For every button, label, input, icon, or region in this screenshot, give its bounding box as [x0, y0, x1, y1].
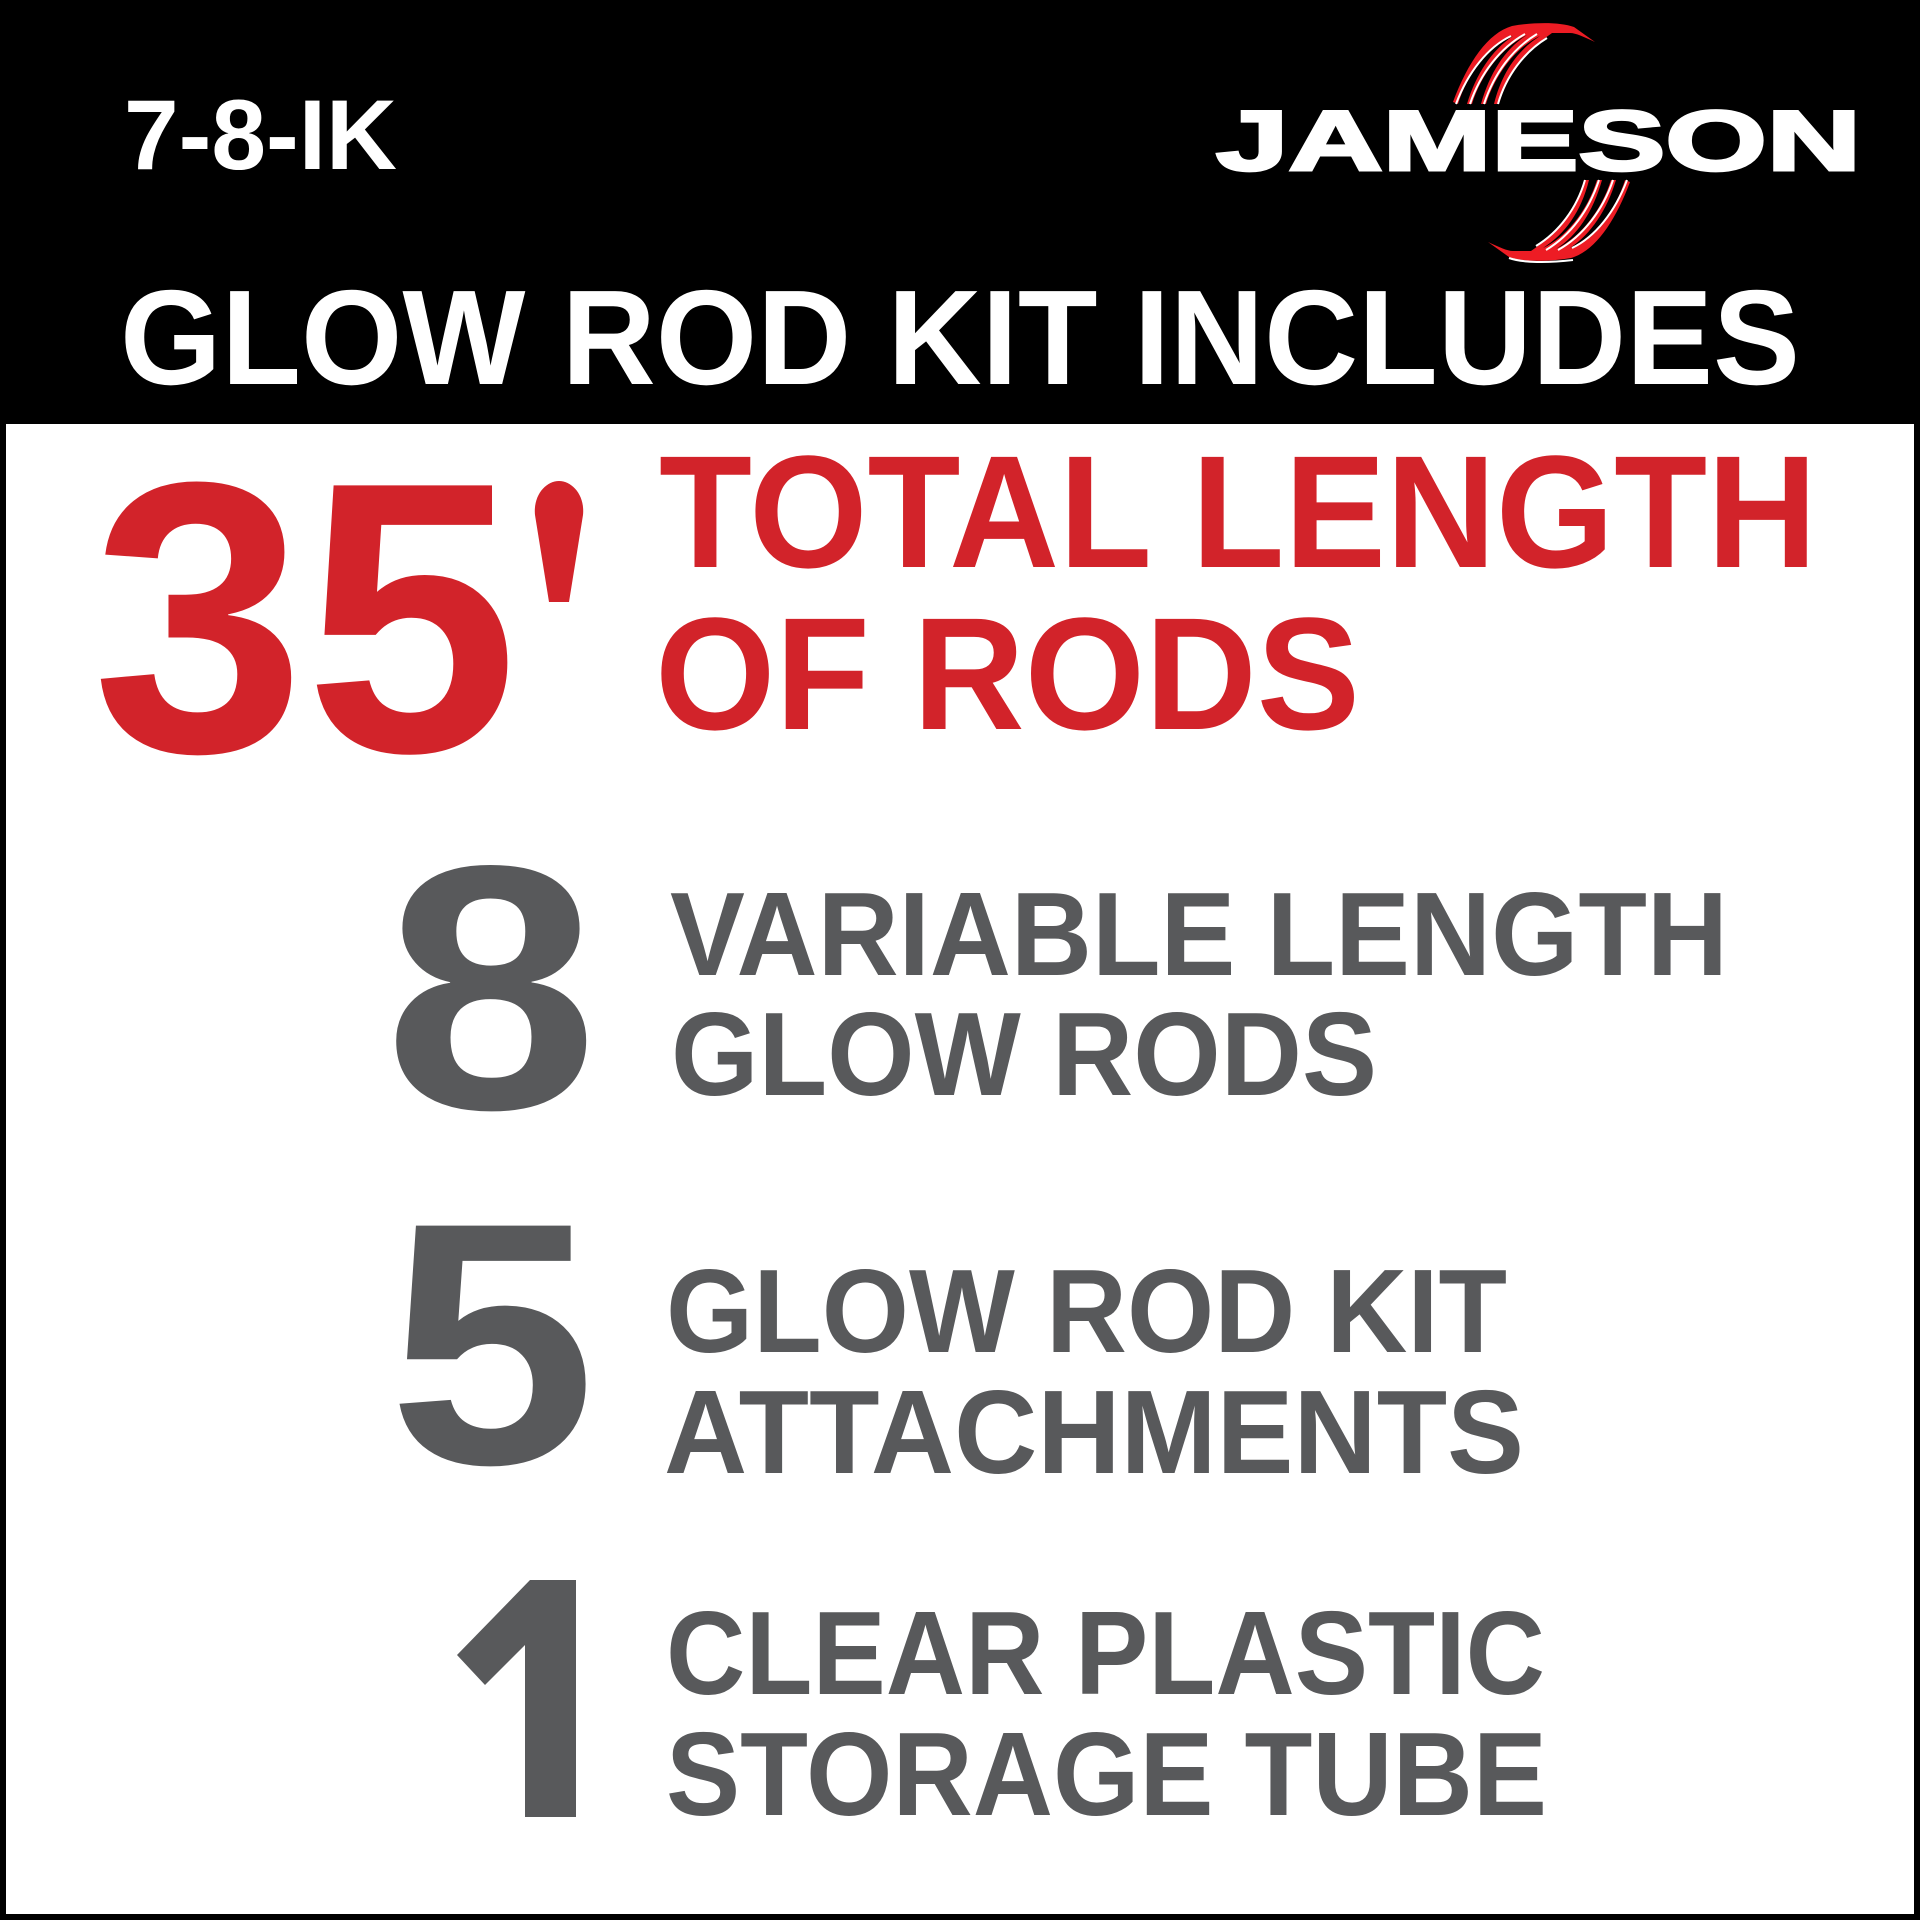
logo: Jameson	[1216, 23, 1861, 262]
number 8: 8	[384, 793, 598, 1182]
description	[664, 1245, 1524, 1499]
stat: 35 feet total length	[92, 402, 1817, 833]
panel: white content area	[6, 424, 1914, 1914]
description	[655, 422, 1817, 763]
logo wordmark: JAMESON	[1216, 94, 1861, 189]
stat: 1 storage tube	[457, 1580, 1543, 1817]
line: variable length: VARIABLE LENGTH	[670, 868, 1728, 1001]
line: storage tube: STORAGE TUBE	[666, 1708, 1547, 1841]
description	[670, 868, 1728, 1121]
line: glow rod kit: GLOW ROD KIT	[666, 1245, 1507, 1378]
description	[666, 1587, 1547, 1841]
line: of rods: OF RODS	[655, 584, 1360, 763]
big number: 35	[92, 402, 518, 833]
stat: 5 attachments	[388, 1152, 1524, 1537]
number 1	[457, 1580, 576, 1817]
number 5: 5	[388, 1152, 596, 1537]
icon: swoosh bottom	[1488, 180, 1630, 262]
line: clear plastic: CLEAR PLASTIC	[666, 1587, 1545, 1720]
stat: 8 glow rods	[384, 793, 1728, 1182]
number 1: 1	[439, 1506, 644, 1891]
heading: GLOW ROD KIT INCLUDES	[120, 262, 1800, 413]
product code: 7-8-IK	[124, 79, 397, 190]
line: total length: TOTAL LENGTH	[659, 422, 1817, 601]
feet mark: '	[539, 438, 579, 774]
feet mark	[535, 438, 583, 774]
line: attachments: ATTACHMENTS	[664, 1366, 1524, 1499]
line: glow rods: GLOW RODS	[671, 988, 1377, 1121]
icon: swoosh top	[1453, 23, 1595, 104]
